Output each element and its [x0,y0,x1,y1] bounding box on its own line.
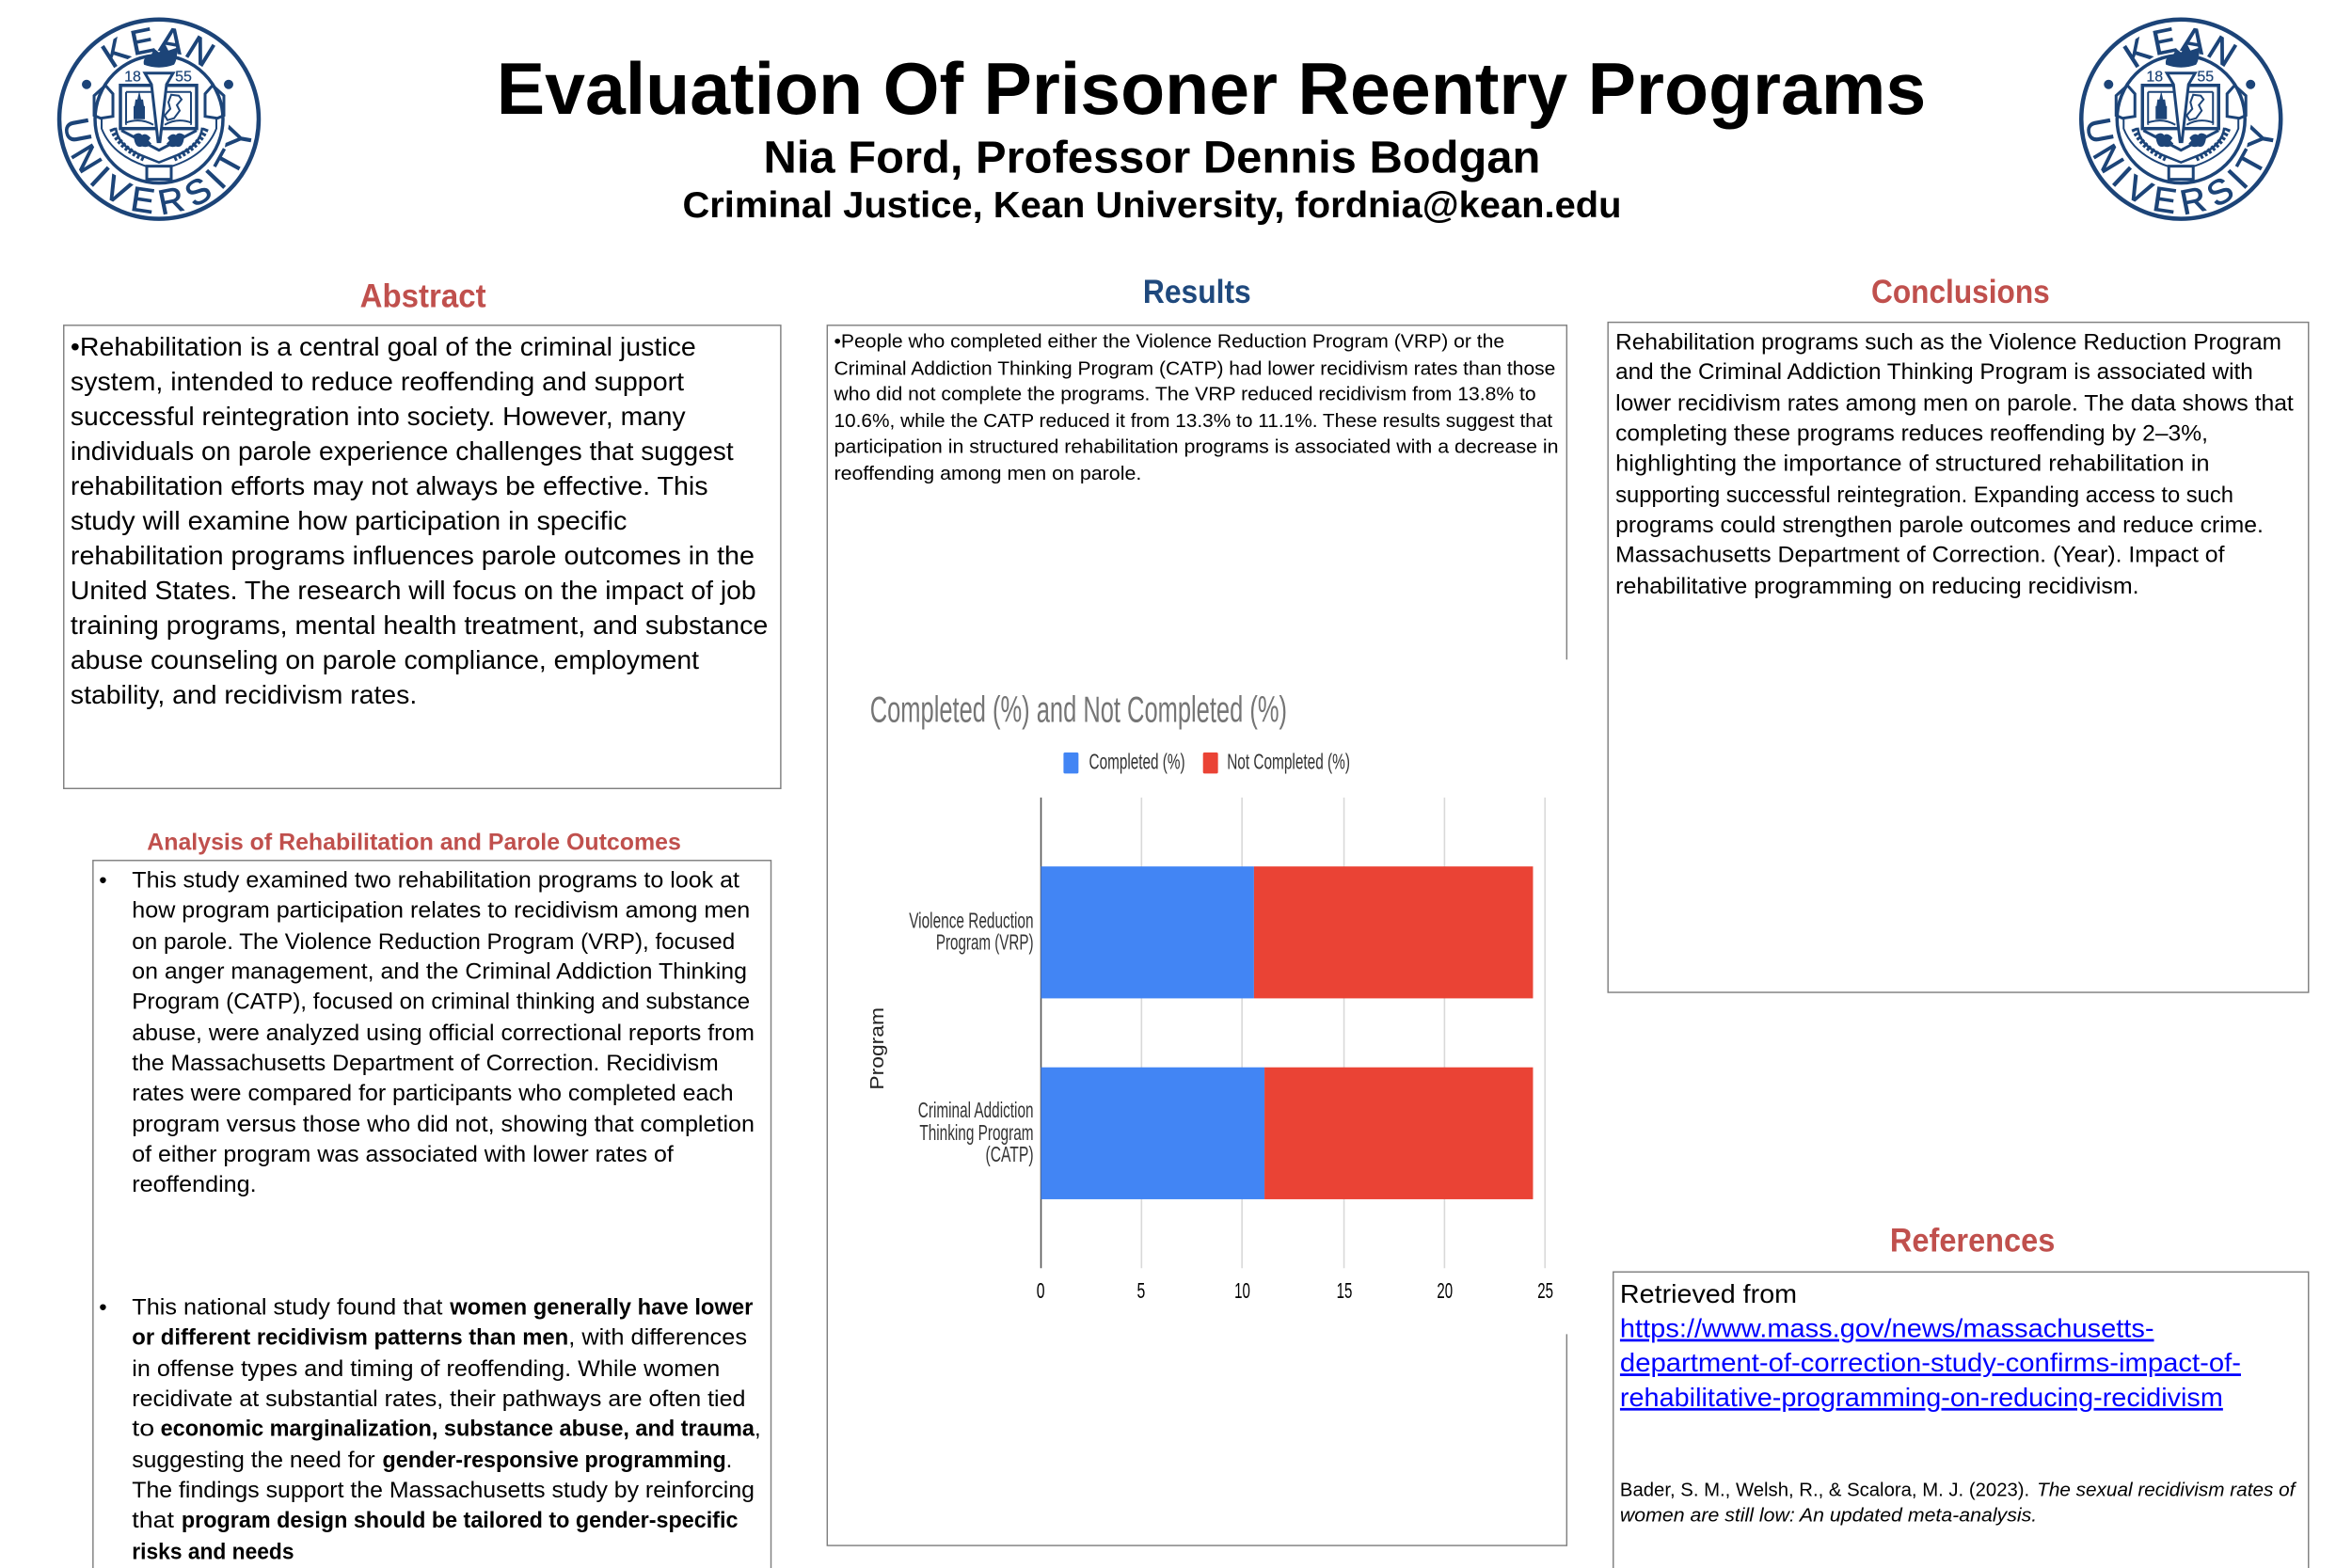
panel: abstract [64,278,781,788]
analysis bullet 2: that [132,1508,174,1533]
x axis ticks: 20 [1437,1278,1453,1303]
conclusions text: rehabilitative programming on reducing recidivism. [1615,574,2139,599]
panel: conclusions [1608,274,2309,992]
results text: who did not complete the programs. The VRP reduced recidivism from 13.8% to [833,384,1536,405]
references text: women are still low: An updated meta-analysis. [1620,1505,2037,1527]
analysis bullet 1: abuse, were analyzed using official correctional reports from [132,1021,755,1046]
title: Evaluation Of Prisoner Reentry Programs [497,47,1926,130]
heading: analysis: Analysis of Rehabilitation and Parole Outcomes [147,831,681,856]
references text: https://www.mass.gov/news/massachusetts- [1620,1314,2154,1343]
authors: Nia Ford, Professor Dennis Bodgan [764,133,1540,182]
y axis title: Program [867,1007,888,1090]
conclusions box [1608,323,2309,992]
results text: 10.6%, while the CATP reduced it from 13.3% to 11.1%. These results suggest that [834,410,1552,432]
abstract text [71,332,768,709]
analysis bullet 2: , with differences [568,1325,747,1351]
conclusions text: supporting successful reintegration. Expanding access to such [1615,483,2233,508]
analysis bullet 1: program versus those who did not, showing that completion [132,1112,755,1137]
analysis bullet 1: the Massachusetts Department of Correction. Recidivism [132,1051,719,1076]
conclusions text: Massachusetts Department of Correction. (Year). Impact of [1615,543,2225,568]
stacked bar chart [828,659,1569,1334]
references text: department-of-correction-study-confirms-impact-of- [1620,1348,2241,1377]
analysis bullet 1: • [99,867,107,893]
analysis bullet 1: Program (CATP), focused on criminal thinking and substance [132,990,750,1015]
conclusions text: programs could strengthen parole outcomes and reduce crime. [1615,513,2264,538]
analysis bullet 2 [99,1295,761,1564]
abstract text: abuse counseling on parole compliance, employment [71,645,699,674]
analysis bullet 2: to [132,1417,154,1442]
panel: results [827,274,1569,1545]
chart legend: Not Completed (%) [1227,750,1350,774]
bar: VRP [1041,866,1533,998]
results text: •People who completed either the Violence Reduction Program (VRP) or the [834,331,1504,353]
analysis box [93,861,771,1568]
heading: references: References [1890,1223,2055,1259]
results text: Criminal Addiction Thinking Program (CATP) had lower recidivism rates than those [834,357,1555,379]
references text: Bader, S. M., Welsh, R., & Scalora, M. J. (2023). [1620,1480,2029,1501]
panel: references [1613,1223,2309,1568]
chart legend [1063,750,1350,774]
logo: Kean University seal right: KEAN [2122,27,2237,68]
references text: rehabilitative-programming-on-reducing-recidivism [1620,1383,2223,1412]
analysis bullet 2: The findings support the Massachusetts study by reinforcing [132,1478,755,1503]
references box [1613,1272,2309,1568]
logo: Kean University seal left: 18 [124,70,141,86]
heading: conclusions: Conclusions [1871,274,2050,310]
conclusions text [1615,329,2294,599]
logo: Kean University seal left [56,17,262,221]
category labels: Thinking Program [919,1120,1034,1145]
abstract text: system, intended to reduce reoffending and support [71,367,684,396]
x axis ticks: 0 [1037,1278,1044,1303]
analysis bullet 2: risks and needs [132,1539,294,1564]
abstract text: rehabilitation programs influences parole outcomes in the [71,541,755,570]
bar: CATP [1041,1068,1533,1199]
analysis bullet 2: This national study found that [132,1295,443,1321]
abstract text: successful reintegration into society. However, many [71,402,686,431]
heading: abstract: Abstract [360,278,486,315]
analysis bullet 1: reoffending. [132,1172,257,1197]
abstract text: •Rehabilitation is a central goal of the criminal justice [71,332,696,361]
analysis bullet 2: program design should be tailored to gender-specific [182,1508,738,1533]
x axis ticks: 10 [1234,1278,1250,1303]
affiliation: Criminal Justice, Kean University, fordnia@kean.edu [682,185,1622,226]
logo: Kean University seal right: 55 [2197,70,2214,86]
panel: analysis [93,831,771,1568]
logo: Kean University seal right [2079,17,2282,221]
analysis bullet 2: in offense types and timing of reoffending. While women [132,1356,720,1382]
chart title: Completed (%) and Not Completed (%) [870,689,1287,730]
analysis bullet 2: gender-responsive programming [383,1448,726,1473]
logo: Kean University seal left: KEAN [101,27,215,68]
conclusions text: completing these programs reduces reoffending by 2–3%, [1615,421,2208,447]
conclusions text: highlighting the importance of structured rehabilitation in [1615,451,2210,476]
logo: Kean University seal right: 18 [2146,70,2163,86]
conclusions text: lower recidivism rates among men on parole. The data shows that [1615,391,2294,417]
analysis bullet 2: recidivate at substantial rates, their pathways are often tied [132,1386,745,1412]
analysis bullet 2: suggesting the need for [132,1448,375,1473]
analysis bullet 1: This study examined two rehabilitation programs to look at [132,867,739,893]
results text: participation in structured rehabilitation programs is associated with a decrease in [834,436,1559,457]
category labels: Criminal Addiction [918,1098,1034,1122]
abstract box [64,325,781,788]
references text [1620,1279,2297,1527]
conclusions text: and the Criminal Addiction Thinking Program is associated with [1615,359,2253,385]
abstract text: rehabilitation efforts may not always be effective. This [71,471,708,500]
category labels [909,908,1034,1166]
references text: Retrieved from [1620,1279,1797,1308]
analysis bullet 1: rates were compared for participants who completed each [132,1081,734,1106]
conclusions text: Rehabilitation programs such as the Violence Reduction Program [1615,329,2281,355]
abstract text: individuals on parole experience challenges that suggest [71,436,734,466]
analysis bullet 1: on parole. The Violence Reduction Program (VRP), focused [132,929,735,955]
abstract text: United States. The research will focus on the impact of job [71,576,756,605]
results text: reoffending among men on parole. [834,463,1141,484]
abstract text: stability, and recidivism rates. [71,680,417,709]
x axis ticks [1037,1278,1553,1303]
logo: Kean University seal left: 55 [175,70,192,86]
x axis ticks: 5 [1137,1278,1145,1303]
analysis bullet 2: . [726,1448,732,1473]
analysis bullet 1: how program participation relates to recidivism among men [132,897,750,923]
heading: results: Results [1143,274,1251,310]
analysis bullet 2: • [99,1295,107,1321]
analysis bullet 2: women generally have lower [449,1295,753,1321]
results text [833,331,1559,484]
analysis bullet 2: or different recidivism patterns than men [132,1325,568,1351]
x axis ticks: 25 [1537,1278,1553,1303]
category labels: Program (VRP) [936,930,1034,955]
references text: The sexual recidivism rates of [2037,1480,2297,1501]
logo: Kean University seal left: UNIVERSITY [65,119,252,214]
analysis bullet 2: economic marginalization, substance abuse, and trauma [161,1417,755,1442]
abstract text: study will examine how participation in specific [71,506,627,535]
analysis bullet 1: of either program was associated with lower rates of [132,1142,674,1167]
category labels: (CATP) [986,1142,1034,1166]
results box [827,325,1566,1545]
analysis bullet 1 [99,867,755,1197]
logo: Kean University seal right: UNIVERSITY [2087,119,2274,214]
analysis bullet 2: , [755,1417,761,1442]
chart legend: Completed (%) [1089,750,1185,774]
analysis bullet 1: on anger management, and the Criminal Addiction Thinking [132,959,747,985]
abstract text: training programs, mental health treatment, and substance [71,610,768,640]
x axis ticks: 15 [1337,1278,1352,1303]
category labels: Violence Reduction [909,908,1034,932]
